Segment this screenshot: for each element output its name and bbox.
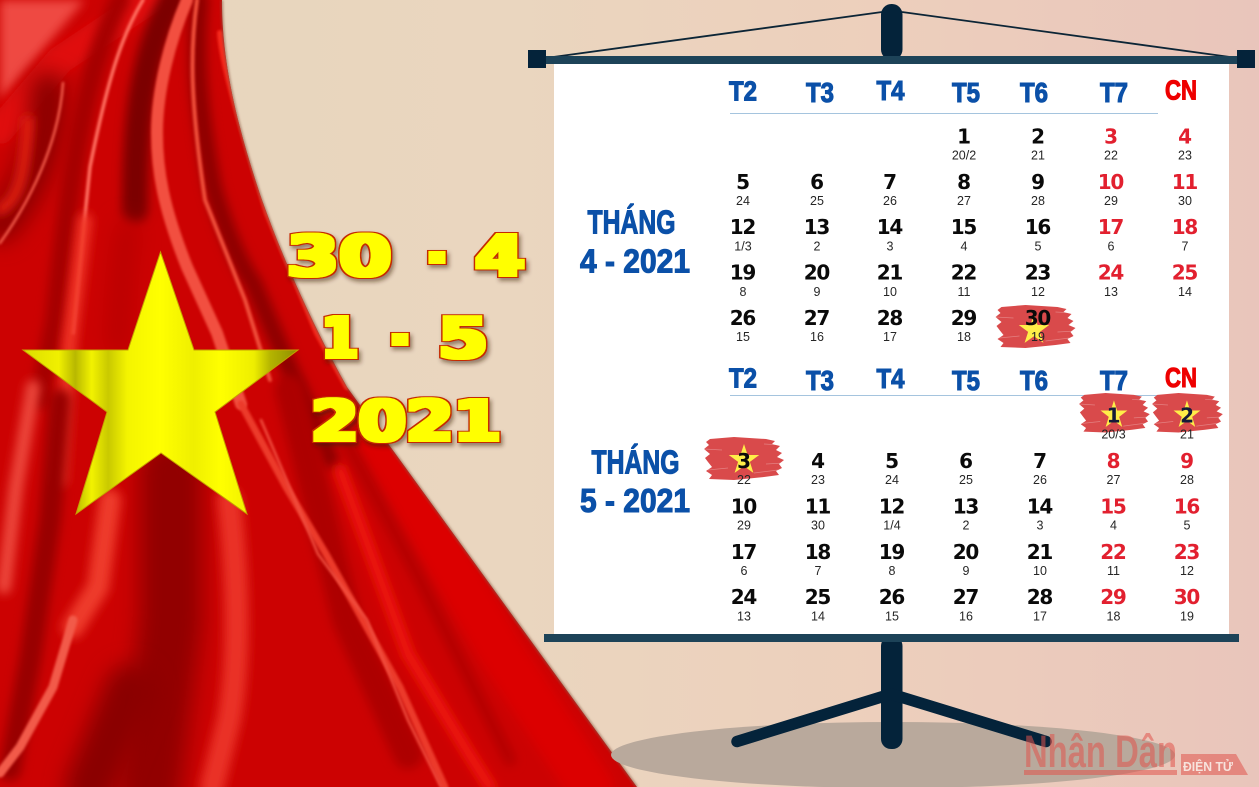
floor shadow [611,722,1175,787]
May week 4: 20 [953,540,978,564]
May week 5 [731,585,1199,624]
rail end left [528,50,546,68]
April week 4: 8 [740,285,747,299]
April week 3: 7 [1182,240,1189,254]
April week 4: 24 [1098,260,1123,284]
April week 5: 19 [1031,330,1045,344]
April week 2: 9 [1031,170,1044,194]
May week 5: 14 [811,610,825,624]
April week 1: 1 [957,124,970,148]
May week 1 [1101,404,1194,442]
April week 3: 12 [730,215,755,239]
April week 4: 25 [1172,260,1197,284]
May week 4: 23 [1174,540,1199,564]
weekday header: April: T5 [952,77,980,108]
May week 4: 18 [805,540,830,564]
weekday header: May: T3 [806,365,834,396]
May week 2: 22 [737,473,751,487]
May week 5: 29 [1100,585,1126,609]
May week 3 [731,494,1199,532]
April week 2: 7 [883,170,896,194]
stand upper pole [881,4,902,60]
April week 3 [730,215,1197,254]
weekday header: May: T2 [729,362,757,394]
calendar grid: April 2021 [730,124,1197,344]
April week 5: 28 [877,306,902,330]
May week 3: 29 [737,518,751,532]
month heading: April 2021: 4 - 2021 [580,244,690,280]
May week 5: 30 [1174,585,1199,609]
May week 4: 10 [1033,564,1047,578]
April week 1 [952,124,1192,162]
April week 4: 20 [804,260,829,284]
May week 4 [731,540,1199,578]
May week 3: 5 [1184,518,1191,532]
April week 1: 2 [1031,124,1044,148]
April week 3: 4 [961,240,968,254]
May week 2: 27 [1107,473,1120,487]
weekday header: April [729,74,1197,108]
May week 2: 4 [811,449,824,473]
May week 4: 9 [963,564,970,578]
May week 4: 21 [1027,540,1052,564]
watermark logo [1024,726,1248,777]
May week 5: 28 [1027,585,1052,609]
weekday header: April: CN [1165,74,1197,106]
weekday header: May [729,362,1197,396]
April week 4: 22 [951,260,976,284]
April week 4: 23 [1025,260,1050,284]
hanging wires [546,12,1230,58]
month heading: April 2021: THÁNG [588,204,676,242]
April week 5: 27 [804,306,829,330]
title line: 30 - 4: - [430,213,444,295]
April week 5: 16 [810,330,824,344]
April week 2: 10 [1098,170,1123,194]
May week 2 [737,449,1194,487]
May week 3: 30 [811,518,825,532]
flag marker: 1 May [1079,393,1150,433]
May week 1: 1 [1107,404,1120,428]
title line: 1 - 5: 5 [438,306,488,372]
May week 3: 3 [1037,518,1044,532]
April week 3: 6 [1108,240,1115,254]
May week 5: 27 [953,585,978,609]
April week 5: 29 [951,306,976,330]
May week 2: 26 [1033,473,1047,487]
May week 5: 17 [1033,610,1047,624]
May week 5: 19 [1180,610,1194,624]
April week 1: 23 [1178,148,1192,162]
title line: 30 - 4: 4 [475,224,525,290]
title line: 2021: 2021 [311,390,501,454]
May week 4: 22 [1100,540,1126,564]
flag marker: 3 May [704,437,784,480]
May week 2: 8 [1107,449,1120,473]
flag star [23,252,298,514]
May week 3: 16 [1174,494,1199,518]
weekday header: April: T4 [876,75,905,106]
weekday header: May: T7 [1100,365,1128,396]
April week 4: 13 [1104,285,1118,299]
May week 4: 6 [741,564,748,578]
May week 1: 21 [1180,428,1194,442]
April week 2: 8 [957,170,970,194]
April week 3: 2 [814,240,821,254]
April week 4: 9 [814,285,821,299]
month heading: May 2021: 5 - 2021 [580,483,690,520]
May week 2: 3 [737,449,750,473]
red flag drape [0,0,640,787]
April week 2: 30 [1178,194,1192,208]
April week 3: 3 [887,240,894,254]
calendar grid: May 2021 [731,404,1199,624]
April week 5: 17 [883,330,897,344]
April week 4: 12 [1031,285,1045,299]
May week 3: 14 [1027,494,1052,518]
May week 4: 12 [1180,564,1194,578]
April week 2: 28 [1031,194,1045,208]
May week 3: 15 [1100,494,1126,518]
April week 2 [736,170,1197,208]
month heading: May 2021 [580,444,690,520]
May week 4: 19 [879,540,904,564]
April week 5 [730,306,1050,344]
May week 3: 10 [731,494,756,518]
rail end right [1237,50,1255,68]
April week 3: 14 [877,215,902,239]
April week 3: 16 [1025,215,1050,239]
white calendar panel [554,64,1229,634]
title line: 1 - 5: - [392,295,408,377]
banner stand [528,4,1255,749]
watermark tag text: ĐIỆN TỬ [1183,759,1233,774]
April week 2: 27 [957,194,971,208]
May week 2: 6 [959,449,972,473]
May week 3: 13 [953,494,978,518]
April week 4 [730,260,1197,299]
May week 5: 24 [731,585,756,609]
April week 1: 20/2 [952,148,976,162]
weekday header: May: T5 [952,365,980,396]
top rail [540,56,1244,64]
May week 2: 9 [1180,449,1193,473]
April week 1: 3 [1104,124,1117,148]
April week 4: 14 [1178,285,1192,299]
April week 4: 11 [958,285,971,299]
May week 2: 24 [885,473,899,487]
April week 2: 5 [736,170,749,194]
May week 3: 4 [1110,518,1117,532]
May week 2: 5 [885,449,898,473]
May week 2: 23 [811,473,825,487]
stand lower pole [881,636,902,749]
weekday header: April: T7 [1100,77,1128,108]
April week 4: 19 [730,260,755,284]
May week 5: 18 [1107,610,1120,624]
April week 5: 30 [1025,306,1050,330]
April week 3: 13 [804,215,829,239]
May week 5: 13 [737,610,751,624]
watermark tag [1181,754,1248,775]
bottom rail [544,634,1239,642]
May week 2: 25 [959,473,973,487]
May week 1: 2 [1180,404,1193,428]
title line: 1 - 5: 1 [322,306,358,372]
watermark wordmark: Nhân Dân [1024,726,1177,777]
flag marker: 2 May [1152,393,1223,433]
watermark underline [1024,770,1177,775]
April week 2: 6 [810,170,823,194]
May week 3: 1/4 [883,518,901,532]
April week 4: 21 [877,260,902,284]
May week 3: 12 [879,494,904,518]
May week 5: 15 [885,610,899,624]
May week 4: 11 [1107,564,1120,578]
May week 4: 8 [889,564,896,578]
May week 3: 2 [963,518,970,532]
May week 5: 26 [879,585,904,609]
weekday header: April: T6 [1020,77,1048,108]
April week 3: 17 [1098,215,1123,239]
May week 4: 17 [731,540,756,564]
holiday dates title [286,213,525,454]
April week 2: 26 [883,194,897,208]
title line: 30 - 4 [286,213,525,295]
month heading: May 2021: THÁNG [592,444,680,482]
April week 1: 21 [1031,148,1045,162]
May week 5: 25 [805,585,830,609]
April week 1: 4 [1178,124,1191,148]
weekday header: May: T6 [1020,365,1048,396]
April week 2: 25 [810,194,824,208]
May week 3: 11 [805,494,830,518]
stand legs [737,694,1046,742]
April week 2: 24 [736,194,750,208]
April week 2: 29 [1104,194,1118,208]
April week 2: 11 [1172,170,1197,194]
drape edge [222,0,637,787]
April week 1: 22 [1104,148,1118,162]
May week 2: 28 [1180,473,1194,487]
April week 5: 15 [736,330,750,344]
April week 3: 1/3 [734,240,752,254]
May week 2: 7 [1033,449,1046,473]
weekday header: April: T3 [806,77,834,108]
May week 5: 16 [959,610,973,624]
weekday header: May: CN [1165,362,1197,393]
title line: 30 - 4: 30 [286,224,392,290]
title line: 1 - 5 [322,295,488,377]
weekday header: April: T2 [729,76,757,106]
April week 3: 5 [1035,240,1042,254]
April week 3: 15 [951,215,976,239]
weekday header: May: T4 [876,363,905,394]
May week 1: 20/3 [1101,428,1126,442]
April week 3: 18 [1172,215,1197,239]
April week 4: 10 [883,285,897,299]
May week 4: 7 [815,564,822,578]
flag marker: 30 April [996,305,1076,348]
month heading: April 2021 [580,204,690,280]
April week 5: 18 [957,330,971,344]
April week 5: 26 [730,306,755,330]
